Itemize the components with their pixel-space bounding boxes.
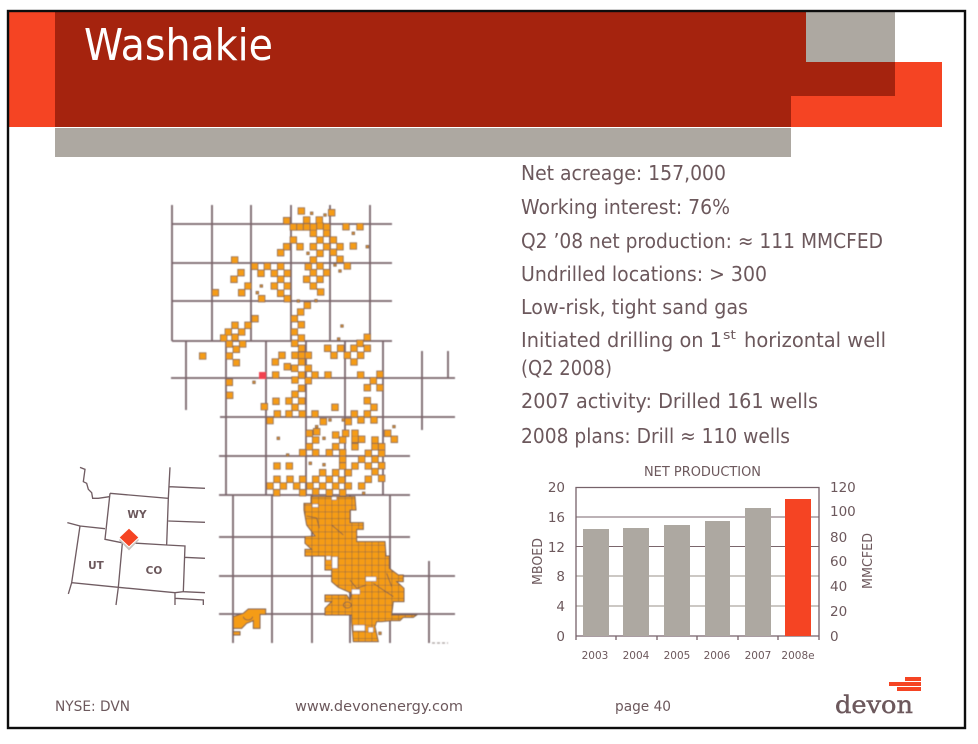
fact: 2007 activity: 2007 activity: Drilled 161 wells [521,389,818,413]
icon: location diamond [119,528,139,550]
right axis labels: 0 [830,629,839,645]
fact: risk profile: Low-risk, tight sand gas [521,295,748,319]
gridlines and axes [576,488,819,640]
left axis title: MBOED [530,538,546,585]
year labels [582,650,815,662]
fact: horizontal well: st [723,327,736,342]
left axis labels: 4 [556,599,565,615]
bars [583,499,811,636]
right axis labels: 100 [830,504,856,520]
northern acreage squares [203,211,394,427]
footer [55,699,671,715]
fact: horizontal well: Initiated drilling on 1 [521,328,722,352]
acreage map [171,205,455,643]
header band: grey corner block [806,12,895,62]
key facts text block [521,161,886,448]
highlighted well marker [259,372,266,379]
left axis labels: 8 [556,569,565,585]
title: Washakie [84,20,273,71]
right axis title: MMCFED [860,533,876,589]
fact: 2008 plans: 2008 plans: Drill ≈ 110 wells [521,424,790,448]
fact: net production: Q2 ’08 net production: ≈ 111 MMCFED [521,229,883,253]
fact: working interest: Working interest: 76% [521,195,730,219]
left axis labels: 12 [548,540,565,556]
fact: horizontal well: (Q2 2008) [521,356,612,380]
year labels: 2007 [745,650,771,662]
right axis labels: 20 [830,604,847,620]
footer: website: www.devonenergy.com [295,699,463,715]
locator map [67,467,205,605]
fact: net acreage: Net acreage: 157,000 [521,161,726,185]
map scale mark [432,642,448,644]
header band: dark red [55,12,895,127]
footer: page number: page 40 [615,699,671,715]
right axis labels: 60 [830,554,847,570]
header band: right accent [791,62,942,127]
fact: horizontal well [521,327,886,380]
fact: horizontal well: horizontal well [744,328,886,352]
right axis labels: 120 [830,480,856,496]
header band: left accent [9,12,55,127]
bar chart: net production [530,464,876,662]
year labels: 2004 [623,650,650,662]
devon logo [835,677,921,719]
footer: ticker: NYSE: DVN [55,699,130,715]
year labels: 2008e [781,650,815,662]
chart title: NET PRODUCTION [644,464,761,480]
year labels: 2003 [582,650,608,662]
left axis labels: 0 [556,629,565,645]
state label: WY: WY [127,509,147,521]
state label: CO: CO [146,565,162,577]
left axis labels: 16 [548,510,565,526]
left axis labels: 20 [548,480,565,496]
fact: undrilled locations: Undrilled locations: > 300 [521,262,767,286]
header band: grey strip [55,128,791,157]
year labels: 2005 [664,650,690,662]
year labels: 2006 [704,650,731,662]
left axis labels [548,480,565,645]
devon logo: devon [835,691,913,719]
right axis labels: 80 [830,530,847,546]
right axis labels [830,480,856,645]
southern acreage cluster [233,432,417,642]
right axis labels: 40 [830,579,847,595]
state label: UT: UT [88,560,105,572]
